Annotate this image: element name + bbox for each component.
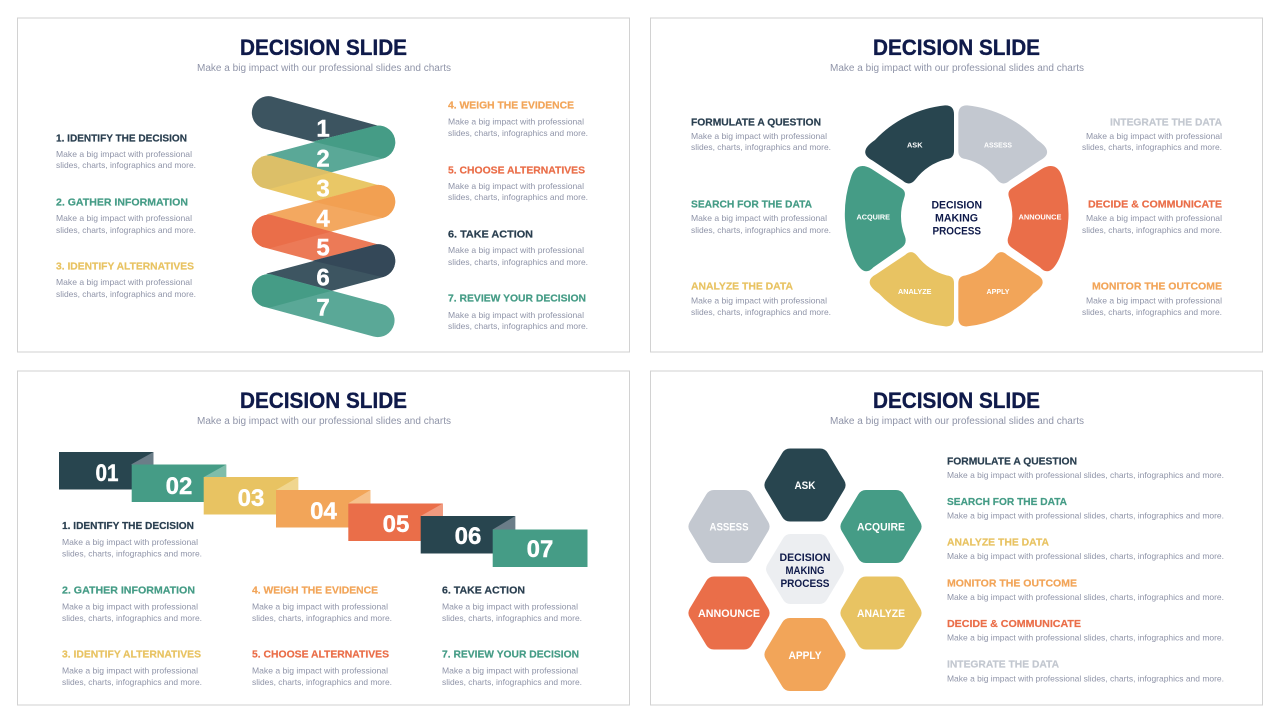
process wheel chart xyxy=(845,105,1069,326)
hexagon chart xyxy=(698,458,912,682)
text block: analyze the data: Make a big impact with professional slides, charts, infographics and more. xyxy=(947,551,1224,561)
text block: monitor the outcome: Make a big impact with professional xyxy=(1086,296,1222,306)
hexagon chart: APPLY xyxy=(788,650,822,662)
ribbon chart: 4 xyxy=(316,206,330,232)
title: DECISION SLIDE xyxy=(873,388,1040,413)
title: DECISION SLIDE xyxy=(873,35,1040,60)
text block: step 1: 1. IDENTIFY THE DECISION xyxy=(62,521,194,532)
text block: formulate a question: Make a big impact with professional slides, charts, infographics and more. xyxy=(947,470,1224,480)
text block: step 2: Make a big impact with professional xyxy=(62,602,198,612)
text block: step 2: 2. GATHER INFORMATION xyxy=(62,586,195,596)
text block: search for the data: slides, charts, infographics and more. xyxy=(691,225,831,235)
text block: step 4 xyxy=(448,100,588,138)
text block: step 7: slides, charts, infographics and more. xyxy=(448,321,588,331)
text block: search for the data: Make a big impact with professional slides, charts, infographics and more. xyxy=(947,510,1224,520)
title: DECISION SLIDE xyxy=(240,35,407,60)
subtitle: Make a big impact with our professional slides and charts xyxy=(830,416,1084,427)
text block: step 7: Make a big impact with professional xyxy=(442,666,578,676)
text block: step 6: Make a big impact with professional xyxy=(442,602,578,612)
text block: step 7 xyxy=(448,294,588,331)
text block: step 2: slides, charts, infographics and more. xyxy=(62,613,202,623)
text block: decide and communicate: slides, charts, infographics and more. xyxy=(1082,225,1222,235)
text block: analyze the data: ANALYZE THE DATA xyxy=(691,282,794,292)
hexagon chart: ASK xyxy=(794,480,816,492)
text block: step 1: Make a big impact with professional xyxy=(56,149,192,159)
text block: integrate the data xyxy=(947,660,1224,684)
text block: analyze the data xyxy=(691,282,831,317)
ribbon chart: 5 xyxy=(316,234,330,262)
text block: formulate a question: FORMULATE A QUESTION xyxy=(691,118,821,128)
text block: formulate a question: Make a big impact with professional xyxy=(691,131,827,141)
subtitle: Make a big impact with our professional slides and charts xyxy=(197,416,451,427)
stepped banners chart: 03 xyxy=(238,485,264,512)
hexagon chart: MAKING xyxy=(786,565,824,577)
text block: step 7: 7. REVIEW YOUR DECISION xyxy=(442,650,579,660)
text block: analyze the data: Make a big impact with professional xyxy=(691,296,827,306)
stepped banners chart: 06 xyxy=(455,523,481,550)
text block: integrate the data: Make a big impact with professional xyxy=(1086,131,1222,141)
stepped banners chart: 01 xyxy=(96,460,118,487)
hexagon chart: DECISION xyxy=(780,552,831,564)
text block: step 5: 5. CHOOSE ALTERNATIVES xyxy=(252,650,389,660)
text block: monitor the outcome: slides, charts, infographics and more. xyxy=(1082,307,1222,317)
text block: monitor the outcome: MONITOR THE OUTCOME xyxy=(1092,282,1222,292)
hexagon chart: ANNOUNCE xyxy=(698,608,760,620)
ribbon chart xyxy=(252,96,395,337)
panel: hexagon slide xyxy=(650,371,1262,705)
text block: integrate the data: INTEGRATE THE DATA xyxy=(1110,118,1223,128)
panel: ribbon slide xyxy=(18,18,630,352)
text block: step 1: slides, charts, infographics and more. xyxy=(56,160,196,170)
text block: step 6: Make a big impact with professional xyxy=(448,245,584,255)
text block: step 4 xyxy=(252,586,392,623)
process wheel chart: ANNOUNCE xyxy=(1018,212,1062,222)
text block: step 5 xyxy=(448,166,588,202)
text block: integrate the data: Make a big impact with professional slides, charts, infographics and more. xyxy=(947,674,1224,684)
text block: decide and communicate: Make a big impact with professional slides, charts, infographics and more. xyxy=(947,632,1224,642)
text block: search for the data: SEARCH FOR THE DATA xyxy=(691,200,813,210)
text block: step 5: Make a big impact with professional xyxy=(448,181,584,191)
process wheel chart: ACQUIRE xyxy=(856,212,890,222)
hexagon chart: ACQUIRE xyxy=(857,522,905,534)
text block: step 4: 4. WEIGH THE EVIDENCE xyxy=(252,586,378,596)
text block: step 6: slides, charts, infographics and more. xyxy=(442,613,582,623)
text block: integrate the data: INTEGRATE THE DATA xyxy=(947,660,1060,670)
process wheel chart: ASK xyxy=(907,140,923,150)
text block: monitor the outcome xyxy=(1082,282,1222,317)
text block: monitor the outcome xyxy=(947,578,1224,602)
title: DECISION SLIDE xyxy=(240,388,407,413)
text block: step 2 xyxy=(62,586,202,623)
text block: step 3: 3. IDENTIFY ALTERNATIVES xyxy=(62,650,201,660)
text block: search for the data xyxy=(691,200,831,235)
stepped banners chart xyxy=(59,452,588,567)
text block: step 3: Make a big impact with professional xyxy=(56,277,192,287)
text block: decide and communicate: DECIDE & COMMUNICATE xyxy=(947,619,1081,630)
text block: step 5: slides, charts, infographics and more. xyxy=(448,192,588,202)
process wheel chart: APPLY xyxy=(986,287,1010,296)
text block: search for the data: SEARCH FOR THE DATA xyxy=(947,497,1068,508)
text block: decide and communicate: DECIDE & COMMUNICATE xyxy=(1088,200,1222,210)
stepped banners chart: 07 xyxy=(527,536,553,563)
text block: step 3: 3. IDENTIFY ALTERNATIVES xyxy=(56,262,194,272)
text block: step 3: slides, charts, infographics and more. xyxy=(56,289,196,299)
process wheel chart: ANALYZE xyxy=(898,287,932,296)
text block: decide and communicate xyxy=(1082,200,1222,235)
text block: step 5: 5. CHOOSE ALTERNATIVES xyxy=(448,166,585,176)
text block: step 2 xyxy=(56,198,196,235)
text block: step 2: Make a big impact with professional xyxy=(56,213,192,223)
ribbon chart: 1 xyxy=(316,116,330,142)
hexagon chart: ANALYZE xyxy=(857,608,905,620)
text block: decide and communicate: Make a big impact with professional xyxy=(1086,213,1222,223)
text block: step 2: 2. GATHER INFORMATION xyxy=(56,198,188,208)
text block: step 4: slides, charts, infographics and more. xyxy=(252,613,392,623)
text block: search for the data xyxy=(947,497,1224,520)
text block: formulate a question: FORMULATE A QUESTION xyxy=(947,456,1077,468)
text block: formulate a question xyxy=(691,118,831,152)
text block: step 4: 4. WEIGH THE EVIDENCE xyxy=(448,100,574,112)
text block: step 6: 6. TAKE ACTION xyxy=(448,230,533,240)
text block: step 1 xyxy=(56,134,196,170)
text block: step 6 xyxy=(448,230,588,267)
text block: step 6: slides, charts, infographics and more. xyxy=(448,257,588,267)
text block: integrate the data xyxy=(1082,118,1223,152)
text block: step 3 xyxy=(56,262,196,299)
text block: step 6: 6. TAKE ACTION xyxy=(442,586,525,596)
process wheel chart: ASSESS xyxy=(984,140,1012,150)
hexagon chart: ASSESS xyxy=(710,522,748,534)
text block: analyze the data: slides, charts, infographics and more. xyxy=(691,307,831,317)
text block: formulate a question xyxy=(947,456,1224,480)
text block: monitor the outcome: Make a big impact with professional slides, charts, infographics and more. xyxy=(947,592,1224,602)
text block: step 6 xyxy=(442,586,582,623)
text block: step 7: 7. REVIEW YOUR DECISION xyxy=(448,294,586,304)
text block: step 1: slides, charts, infographics and more. xyxy=(62,548,202,558)
text block: step 1 xyxy=(62,521,202,558)
stepped banners chart: 04 xyxy=(310,498,337,525)
text block: search for the data: Make a big impact with professional xyxy=(691,213,827,223)
text block: step 3: slides, charts, infographics and more. xyxy=(62,677,202,687)
text block: step 2: slides, charts, infographics and more. xyxy=(56,225,196,235)
text block: step 1: Make a big impact with professional xyxy=(62,537,198,547)
text block: step 4: Make a big impact with professional xyxy=(252,602,388,612)
text block: monitor the outcome: MONITOR THE OUTCOME xyxy=(947,578,1077,590)
text block: step 3: Make a big impact with professional xyxy=(62,666,198,676)
text block: step 1: 1. IDENTIFY THE DECISION xyxy=(56,134,187,144)
panel: process wheel slide xyxy=(650,18,1262,352)
panel: stepped banners slide xyxy=(18,371,630,705)
process wheel chart: PROCESS xyxy=(932,226,981,238)
text block: step 5: slides, charts, infographics and more. xyxy=(252,677,392,687)
text block: integrate the data: slides, charts, infographics and more. xyxy=(1082,142,1222,152)
text block: step 7 xyxy=(442,650,582,687)
subtitle: Make a big impact with our professional slides and charts xyxy=(830,63,1084,74)
process wheel chart: MAKING xyxy=(935,212,978,224)
text block: formulate a question: slides, charts, infographics and more. xyxy=(691,142,831,152)
text block: step 7: Make a big impact with professional xyxy=(448,310,584,320)
ribbon chart: 6 xyxy=(316,264,330,292)
ribbon chart: 2 xyxy=(316,146,330,172)
hexagon chart: PROCESS xyxy=(780,578,830,590)
text block: step 4: Make a big impact with professional xyxy=(448,116,584,126)
stepped banners chart: 02 xyxy=(166,473,192,500)
stepped banners chart: 05 xyxy=(383,511,409,538)
text block: step 5: Make a big impact with professional xyxy=(252,666,388,676)
text block: analyze the data: ANALYZE THE DATA xyxy=(947,538,1050,548)
text block: step 5 xyxy=(252,650,392,687)
ribbon chart: 3 xyxy=(316,176,330,202)
subtitle: Make a big impact with our professional slides and charts xyxy=(197,63,451,74)
process wheel chart: DECISION xyxy=(932,200,982,212)
ribbon chart: 7 xyxy=(316,294,330,322)
text block: step 7: slides, charts, infographics and more. xyxy=(442,677,582,687)
text block: decide and communicate xyxy=(947,619,1224,642)
text block: analyze the data xyxy=(947,538,1224,561)
text block: step 4: slides, charts, infographics and more. xyxy=(448,128,588,138)
text block: step 3 xyxy=(62,650,202,687)
